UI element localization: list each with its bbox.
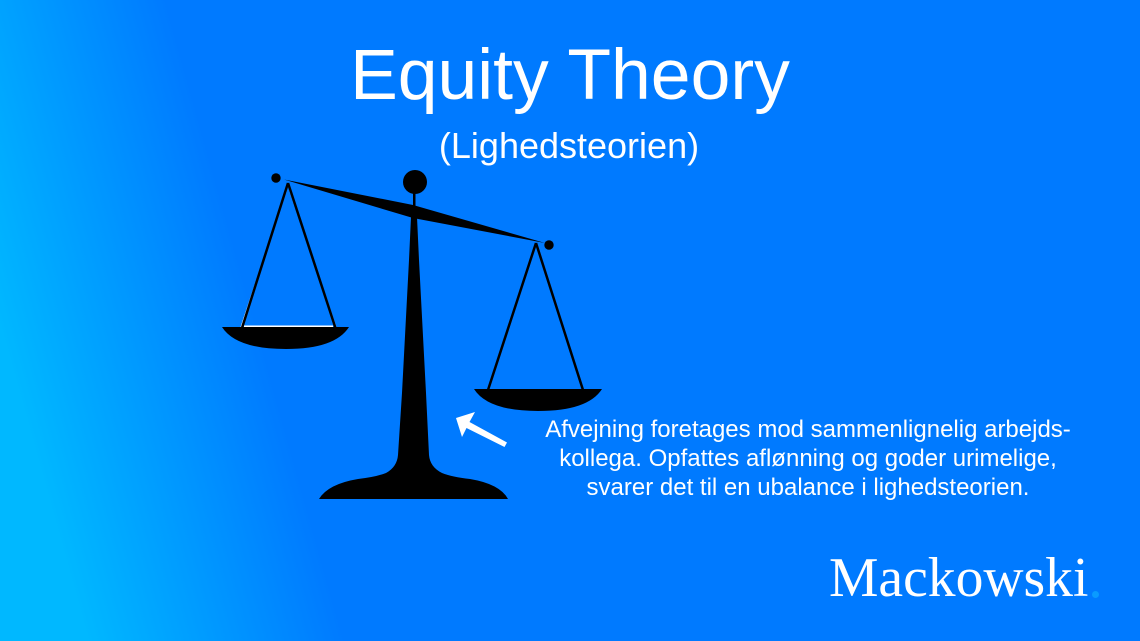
explanatory text: svarer det til en ubalance i lighedsteorien. xyxy=(587,474,1029,501)
scale beam xyxy=(284,180,545,243)
logo xyxy=(829,547,1099,609)
beam end balls xyxy=(271,173,554,250)
title: Equity Theory xyxy=(350,35,790,115)
explanatory text: kollega. Opfattes aflønning og goder urimelige, xyxy=(559,445,1057,472)
explanatory text: Afvejning foretages mod sammenlignelig arbejds- xyxy=(545,416,1071,443)
left pan xyxy=(222,183,349,349)
explanatory text xyxy=(545,416,1071,501)
rod and top ball xyxy=(403,170,427,208)
right pan xyxy=(474,243,602,411)
subtitle: (Lighedsteorien) xyxy=(439,125,699,166)
logo wordmark: Mackowski xyxy=(829,547,1088,609)
logo dot xyxy=(1092,591,1098,598)
arrow xyxy=(456,412,507,447)
scale stand xyxy=(319,217,508,499)
